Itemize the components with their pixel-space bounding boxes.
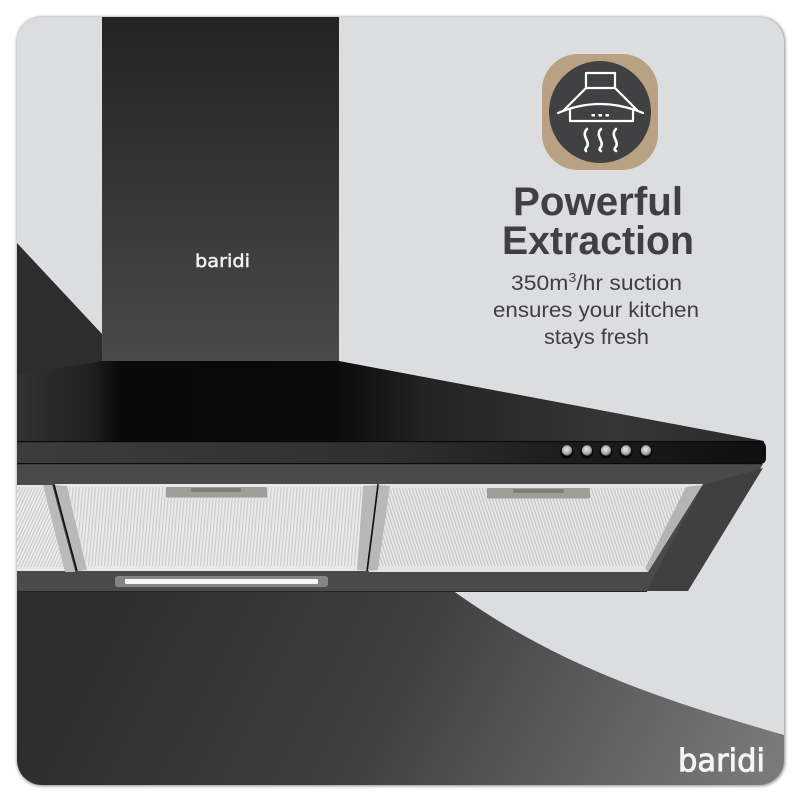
hood bottom edge bbox=[114, 591, 647, 592]
description text: 3 bbox=[568, 270, 576, 285]
description text: ensures your kitchen bbox=[493, 299, 699, 322]
description text bbox=[493, 270, 699, 349]
filter handle bbox=[487, 488, 590, 498]
background dark shape bbox=[17, 243, 784, 785]
filter panel: left partial bbox=[17, 485, 75, 572]
filter panel: right bbox=[368, 484, 703, 572]
description text: 350m bbox=[511, 272, 564, 295]
icon: range hood badge bbox=[542, 54, 658, 170]
description text: stays fresh bbox=[544, 326, 649, 349]
control buttons bbox=[560, 445, 652, 458]
description text: /hr suction bbox=[576, 272, 682, 295]
filter panel: centre bbox=[55, 484, 377, 571]
filter handle bbox=[166, 487, 267, 498]
seams between filters bbox=[54, 485, 77, 571]
brand logo: baridi bbox=[678, 743, 765, 779]
chimney bbox=[102, 17, 339, 362]
hood canopy top bbox=[17, 361, 764, 445]
chimney logo: baridi bbox=[195, 251, 250, 272]
hood lower body bbox=[17, 464, 763, 591]
hood side face bbox=[646, 468, 763, 591]
heading bbox=[502, 180, 694, 263]
control band bbox=[17, 441, 766, 464]
heading: Extraction bbox=[502, 219, 694, 263]
heading: Powerful bbox=[513, 180, 683, 224]
under-hood light bbox=[115, 576, 328, 587]
seam between centre and right filters bbox=[367, 485, 378, 571]
